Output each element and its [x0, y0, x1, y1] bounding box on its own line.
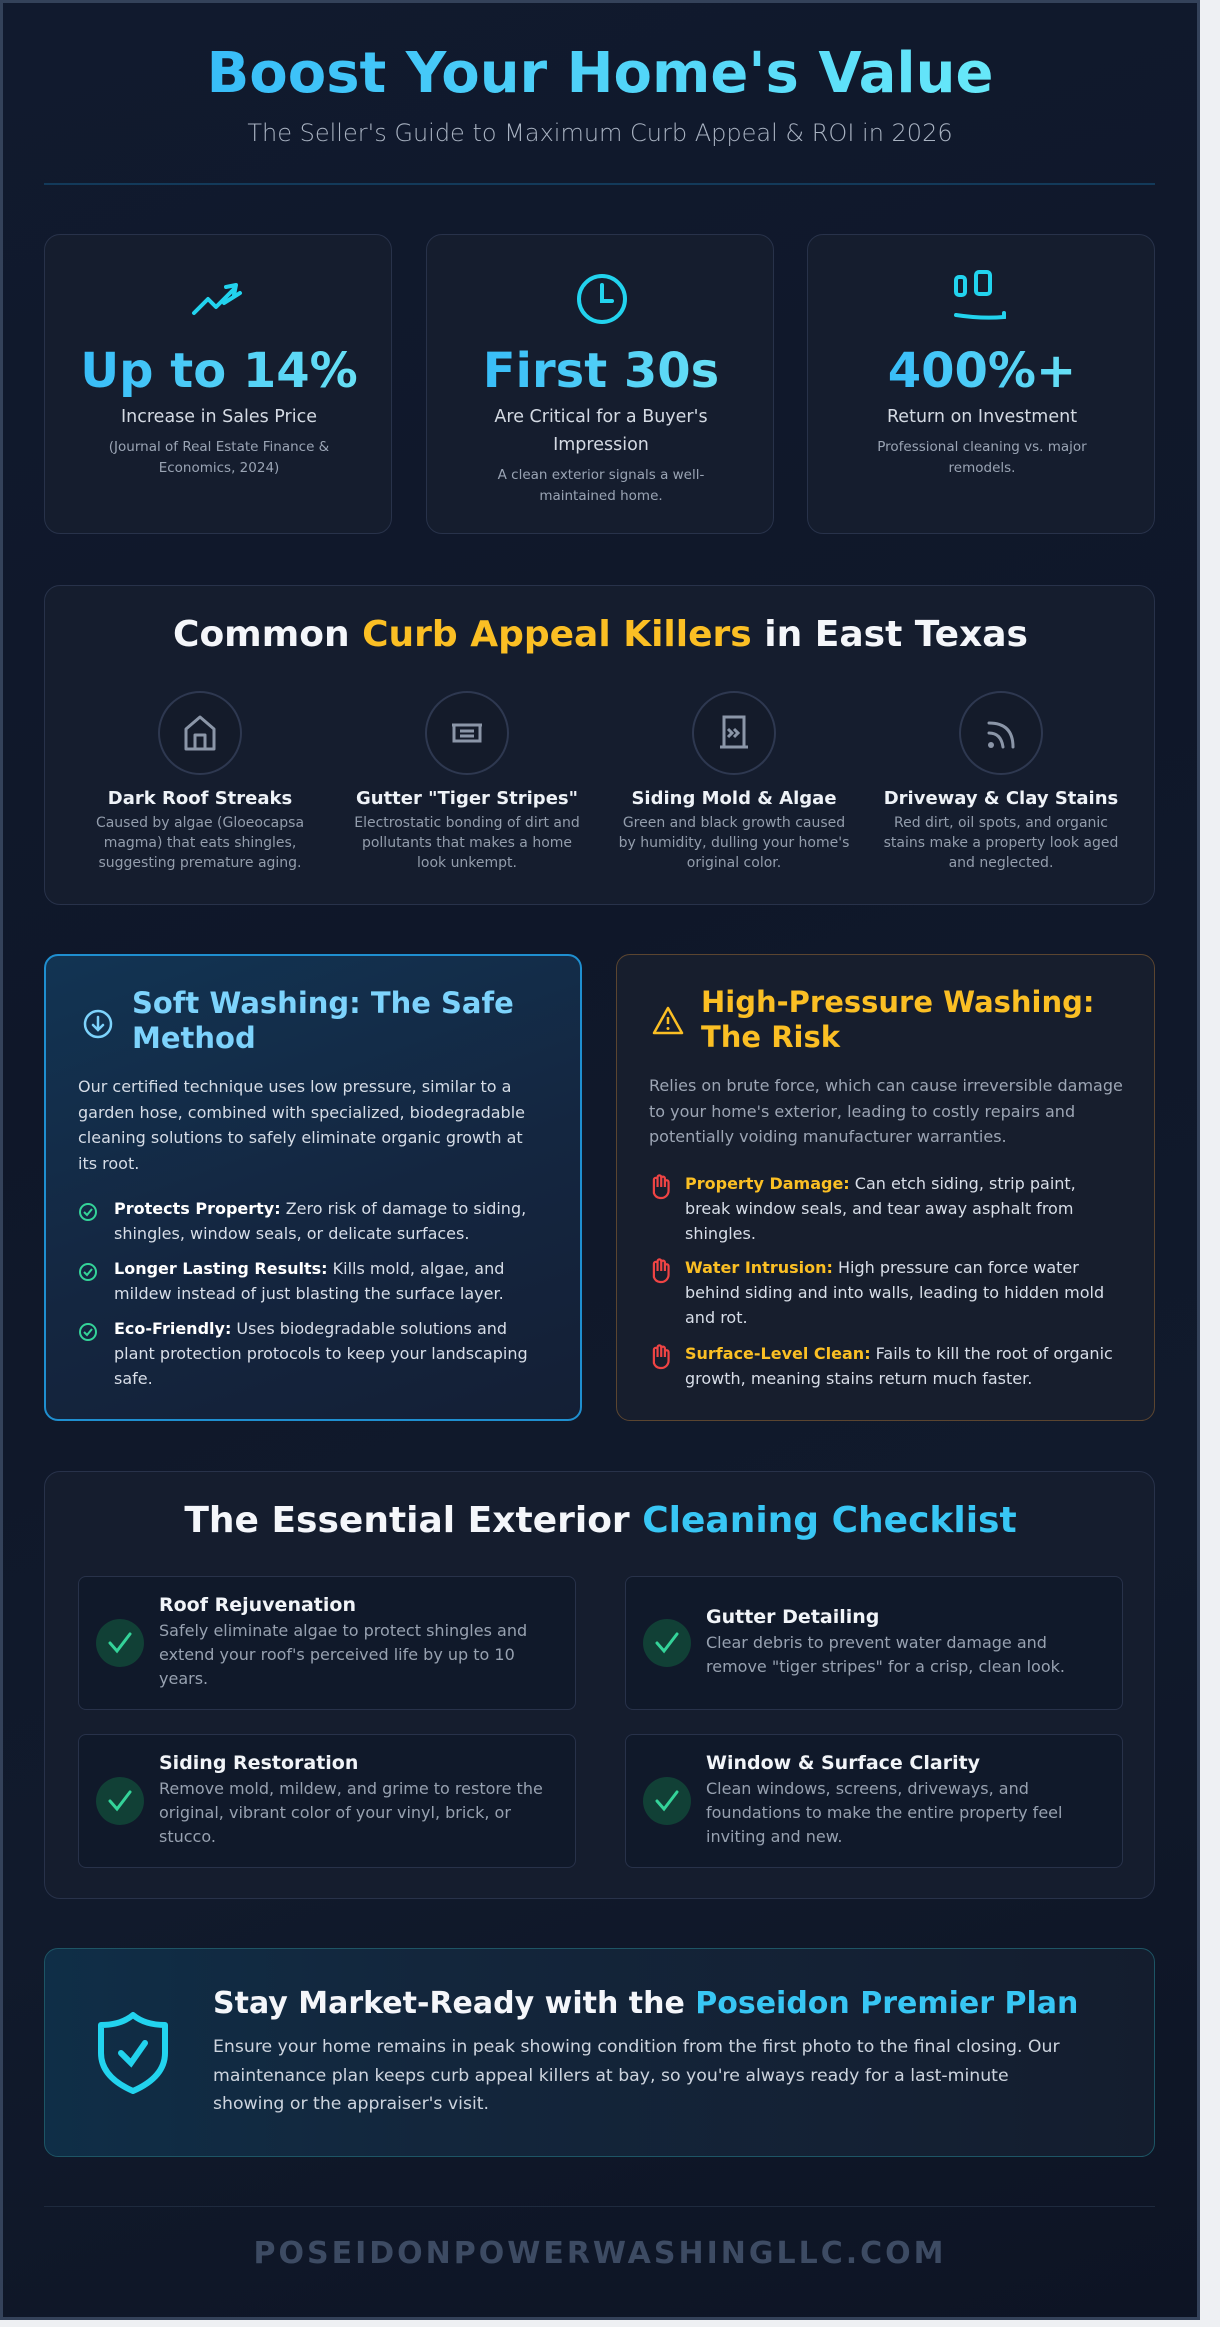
- item: gutter: Clear debris to prevent water damage and remove "tiger stripes" for a crisp, clean look.: [706, 1633, 1065, 1676]
- title: Boost Your Home's Value: [207, 41, 993, 106]
- item: window: Window & Surface Clarity: [706, 1752, 980, 1774]
- item: roof: Safely eliminate algae to protect shingles and extend your roof's perceived life by up to 10 years.: [159, 1621, 527, 1688]
- heading: The Essential Exterior Cleaning Checklist: [184, 1500, 1017, 1541]
- item: siding: [78, 1734, 576, 1868]
- stat card 1: [44, 234, 392, 534]
- item: window: [625, 1734, 1123, 1868]
- stat card 3: [807, 234, 1155, 534]
- icon: house: [158, 691, 242, 775]
- item: window: Clean windows, screens, driveways, and foundations to make the entire property feel inviting and new.: [706, 1779, 1062, 1846]
- icon: gutter: [425, 691, 509, 775]
- heading: Common Curb Appeal Killers in East Texas: [173, 614, 1028, 655]
- killer: siding: Siding Mold & Algae: [631, 788, 837, 809]
- killer: driveway: Driveway & Clay Stains: [884, 788, 1118, 809]
- stat: 400%+: [888, 343, 1076, 399]
- risk list: [652, 1174, 1113, 1388]
- icon: stains: [959, 691, 1043, 775]
- footer url: POSEIDONPOWERWASHINGLLC.COM: [253, 2236, 947, 2271]
- bullet list: Eco-Friendly: Uses biodegradable solutions and plant protection protocols to keep your landscaping safe.: [114, 1319, 528, 1388]
- note: Professional cleaning vs. major remodels.: [877, 439, 1087, 476]
- killer: siding: [619, 691, 849, 871]
- icon: warning: [652, 1006, 684, 1034]
- panel: curb appeal killers: [44, 585, 1155, 905]
- heading: High-Pressure Washing: The Risk: [701, 985, 1094, 1054]
- item: siding: Siding Restoration: [159, 1752, 358, 1774]
- killer: gutter: Gutter "Tiger Stripes": [356, 788, 578, 809]
- label: Increase in Sales Price: [121, 407, 317, 427]
- subtitle: The Seller's Guide to Maximum Curb Appeal & ROI in 2026: [247, 119, 953, 147]
- label: Return on Investment: [887, 407, 1077, 427]
- stat: Up to 14%: [80, 343, 358, 399]
- stat: First 30s: [483, 343, 719, 399]
- body: Relies on brute force, which can cause irreversible damage to your home's exterior, leading to costly repairs and potentially voiding manufacturer warranties.: [649, 1076, 1123, 1146]
- risk list: Property Damage: Can etch siding, strip paint, break window seals, and tear away asphalt from shingles.: [685, 1174, 1076, 1243]
- killer: driveway: Red dirt, oil spots, and organic stains make a property look aged and neglected.: [884, 815, 1118, 871]
- heading: Soft Washing: The Safe Method: [132, 986, 514, 1055]
- stat card 2: [426, 234, 774, 534]
- item: gutter: [625, 1576, 1123, 1710]
- panel: soft washing: [44, 954, 582, 1421]
- bullet list: [79, 1199, 528, 1388]
- panel: premier plan: [44, 1948, 1155, 2157]
- icon: arrow-down circle: [84, 1010, 112, 1038]
- killer: roof: Caused by algae (Gloeocapsa magma) that eats shingles, suggesting premature aging.: [96, 815, 304, 871]
- icon: siding: [692, 691, 776, 775]
- item: roof: Roof Rejuvenation: [159, 1594, 356, 1616]
- risk list: Surface-Level Clean: Fails to kill the root of organic growth, meaning stains return much faster.: [685, 1344, 1113, 1388]
- heading: Stay Market-Ready with the Poseidon Premier Plan: [213, 1986, 1078, 2021]
- killer: roof: Dark Roof Streaks: [108, 788, 292, 809]
- label: Are Critical for a Buyer's Impression: [494, 407, 708, 455]
- bullet list: Protects Property: Zero risk of damage to siding, shingles, window seals, or delicate surfaces.: [114, 1199, 526, 1243]
- killer: roof: [96, 691, 304, 871]
- note: A clean exterior signals a well-maintained home.: [498, 467, 704, 504]
- killer: gutter: [354, 691, 580, 871]
- killer: gutter: Electrostatic bonding of dirt and pollutants that makes a home look unkempt.: [354, 815, 580, 871]
- killer: driveway: [884, 691, 1118, 871]
- icon: clock: [577, 274, 627, 324]
- source: (Journal of Real Estate Finance & Economics, 2024): [109, 439, 329, 476]
- item: siding: Remove mold, mildew, and grime to restore the original, vibrant color of your vinyl, brick, or stucco.: [159, 1779, 543, 1846]
- risk list: Water Intrusion: High pressure can force water behind siding and into walls, leading to hidden mold and rot.: [685, 1258, 1104, 1327]
- body: Ensure your home remains in peak showing condition from the first photo to the final closing. Our maintenance plan keeps curb appeal killers at bay, so you're always ready for a last-minute showing or the appraiser's visit.: [213, 2037, 1060, 2114]
- panel: high pressure: [616, 954, 1155, 1421]
- bullet list: Longer Lasting Results: Kills mold, algae, and mildew instead of just blasting the surface layer.: [114, 1259, 504, 1303]
- icon: money: [954, 270, 1006, 320]
- icon: shield: [98, 2012, 168, 2094]
- icon: trend: [192, 283, 242, 316]
- body: Our certified technique uses low pressure, similar to a garden hose, combined with specialized, biodegradable cleaning solutions to safely eliminate organic growth at its root.: [78, 1077, 525, 1172]
- item: gutter: Gutter Detailing: [706, 1606, 879, 1628]
- item: roof: [78, 1576, 576, 1710]
- killer: siding: Green and black growth caused by humidity, dulling your home's original color.: [619, 815, 849, 871]
- panel: checklist: [44, 1471, 1155, 1899]
